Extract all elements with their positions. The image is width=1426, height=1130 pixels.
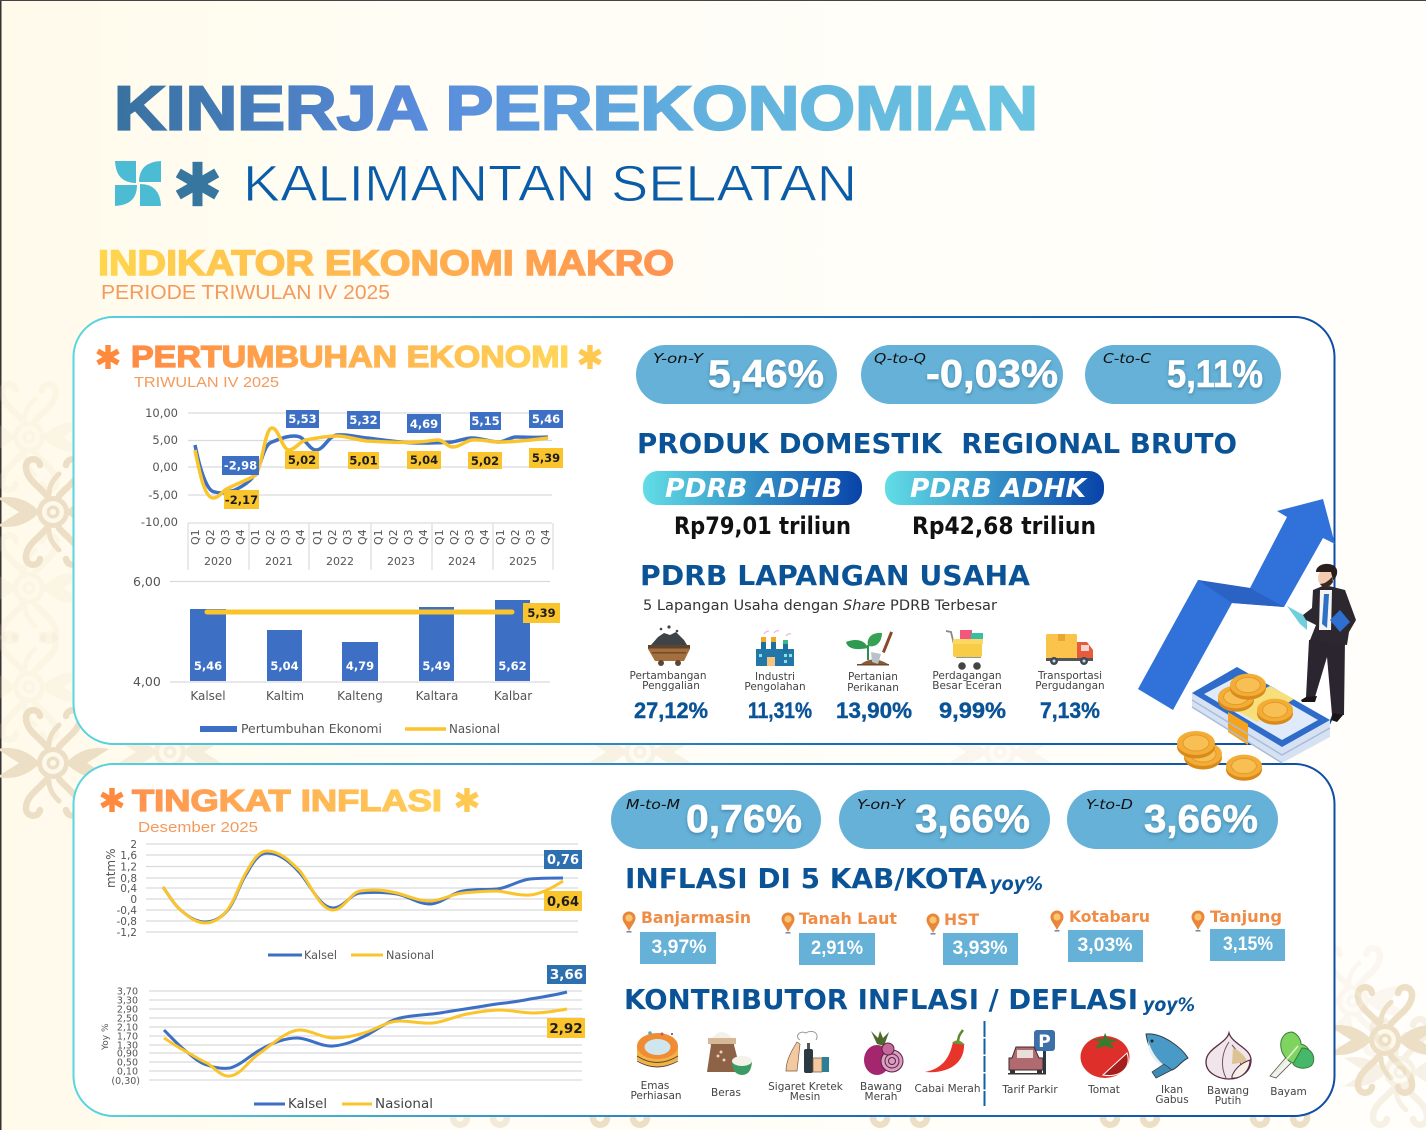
contributor labels: Cabai Merah	[914, 1083, 981, 1095]
inflasi kab/kota values: 2,91%	[811, 938, 863, 959]
line chart: inflasi yoy: 0,10	[117, 1066, 138, 1078]
line chart: pertumbuhan ekonomi per triwulan: Q3	[402, 529, 415, 545]
contributor labels: Perhiasan	[630, 1090, 682, 1102]
icon: gold jewelry	[637, 1031, 678, 1067]
panel: pertumbuhan ekonomi	[74, 317, 1334, 744]
bar chart: pertumbuhan ekonomi kalimantan: 5,49	[422, 659, 451, 673]
line chart: inflasi mtm: 0,8	[120, 873, 137, 885]
line chart: inflasi mtm: 0,4	[120, 883, 137, 895]
bar chart: pertumbuhan ekonomi kalimantan: Kalbar	[494, 689, 532, 703]
line chart: inflasi mtm	[104, 839, 582, 962]
inflasi kab/kota values: Tanah Laut	[799, 909, 897, 928]
line chart: pertumbuhan ekonomi per triwulan: Q2	[509, 529, 522, 545]
sector labels and shares: 7,13%	[1040, 698, 1100, 723]
icon: factory	[756, 631, 794, 666]
line chart: pertumbuhan ekonomi per triwulan: Q2	[326, 529, 339, 545]
inflasi kab/kota values: 3,03%	[1078, 935, 1133, 956]
inflasi kab/kota values: 3,93%	[952, 938, 1008, 959]
stat pills: inflasi: Y-to-D	[1086, 798, 1133, 813]
line chart: inflasi yoy: 3,70	[117, 986, 138, 998]
line chart: pertumbuhan ekonomi per triwulan: Q4	[234, 529, 247, 545]
inflasi kab/kota values: Banjarmasin	[641, 908, 751, 927]
icon: cigarette	[786, 1031, 829, 1073]
bar chart: pertumbuhan ekonomi kalimantan: 5,04	[270, 659, 299, 673]
line chart: inflasi yoy: 3,66	[550, 967, 583, 983]
line chart: pertumbuhan ekonomi per triwulan: Q2	[448, 529, 461, 545]
contributor labels: Gabus	[1155, 1094, 1189, 1106]
icon: mining cart	[648, 625, 690, 666]
inflasi kab/kota values	[622, 907, 1285, 965]
line chart: pertumbuhan ekonomi per triwulan: -10,00	[141, 515, 178, 529]
line chart: inflasi mtm: 0,64	[547, 895, 579, 910]
heading: tingkat inflasi	[100, 783, 479, 818]
icon: parking fee: P	[1038, 1032, 1051, 1052]
stat pills: pertumbuhan: -0,03%	[926, 353, 1058, 396]
sector labels and shares: Perikanan	[847, 682, 899, 694]
line chart: pertumbuhan ekonomi per triwulan: Q4	[356, 529, 369, 545]
sector labels and shares: 13,90%	[836, 698, 912, 723]
contributor labels: Bawang	[1207, 1085, 1249, 1097]
line chart: pertumbuhan ekonomi per triwulan: 2025	[509, 555, 537, 568]
heading: kontributor inflasi: yoy%	[1143, 994, 1195, 1016]
stat pills: inflasi: 3,66%	[1144, 798, 1258, 841]
line chart: pertumbuhan ekonomi per triwulan: 2021	[265, 555, 293, 568]
line chart: pertumbuhan ekonomi per triwulan: 4,69	[410, 417, 438, 431]
PDRB ADHK: Rp42,68 triliun	[912, 512, 1096, 540]
line chart: inflasi yoy	[101, 965, 586, 1112]
contributor labels: Merah	[865, 1091, 897, 1103]
line chart: pertumbuhan ekonomi per triwulan: 5,02	[471, 454, 499, 468]
stat pills: pertumbuhan: C-to-C	[1103, 352, 1152, 367]
icon: parking fee	[1008, 1030, 1055, 1074]
line chart: inflasi mtm: 2	[130, 839, 137, 851]
bar chart: pertumbuhan ekonomi kalimantan: 5,62	[498, 659, 527, 673]
PDRB ADHB: PDRB ADHB	[665, 474, 842, 504]
panel: tingkat inflasi	[74, 764, 1334, 1116]
inflasi kab/kota values: Tanjung	[1210, 907, 1282, 926]
line chart: pertumbuhan ekonomi per triwulan: 2020	[204, 555, 232, 568]
bar chart: pertumbuhan ekonomi kalimantan: Pertumbuhan Ekonomi	[241, 722, 382, 736]
PDRB ADHB: Rp79,01 triliun	[674, 512, 851, 540]
line chart: pertumbuhan ekonomi per triwulan: Q2	[204, 529, 217, 545]
bar chart: pertumbuhan ekonomi kalimantan: 5,46	[194, 659, 222, 673]
line chart: pertumbuhan ekonomi per triwulan: Q1	[311, 529, 324, 545]
bar chart: pertumbuhan ekonomi kalimantan: Nasional	[449, 722, 500, 736]
line chart: inflasi yoy: 0,50	[117, 1058, 138, 1068]
line chart: inflasi mtm: -1,2	[116, 927, 137, 939]
stat pills: pertumbuhan: Y-on-Y	[653, 352, 704, 367]
line chart: pertumbuhan ekonomi per triwulan: Q4	[417, 529, 430, 545]
line chart: pertumbuhan ekonomi per triwulan: Q3	[219, 529, 232, 545]
bar chart: pertumbuhan ekonomi kalimantan	[133, 574, 560, 736]
icon: shopping cart	[946, 630, 983, 670]
icon: red onion	[864, 1031, 903, 1075]
stat pills: pertumbuhan: 5,46%	[708, 353, 824, 396]
subtitle: KALIMANTAN SELATAN	[243, 155, 857, 212]
inflasi kab/kota values: HST	[944, 910, 979, 929]
line chart: inflasi mtm: 0,76	[547, 853, 579, 868]
PDRB ADHK: PDRB ADHK	[910, 474, 1088, 504]
heading: inflasi kab/kota: INFLASI DI 5 KAB/KOTA	[625, 862, 987, 895]
bar chart: pertumbuhan ekonomi kalimantan: Kaltim	[266, 689, 304, 703]
contributor labels: Tarif Parkir	[1001, 1084, 1058, 1096]
icon: red chili	[925, 1030, 965, 1072]
icon: delivery truck	[1046, 634, 1093, 665]
line chart: inflasi mtm: mtm%	[104, 848, 118, 888]
contributor labels: Putih	[1215, 1095, 1241, 1107]
icon: rice sack	[707, 1032, 752, 1075]
line chart: pertumbuhan ekonomi per triwulan: 5,02	[288, 453, 316, 467]
line chart: pertumbuhan ekonomi per triwulan: 5,39	[532, 451, 560, 465]
line chart: pertumbuhan ekonomi per triwulan: Q4	[478, 529, 491, 545]
stat pills: pertumbuhan: 5,11%	[1167, 353, 1263, 396]
line chart: pertumbuhan ekonomi per triwulan: 2022	[326, 555, 354, 568]
period: desember: Desember 2025	[138, 819, 258, 836]
line chart: pertumbuhan ekonomi per triwulan: 10,00	[145, 406, 178, 420]
divider: inflasi / deflasi	[984, 1021, 986, 1106]
line chart: inflasi mtm: Kalsel	[304, 948, 337, 962]
line chart: pertumbuhan ekonomi per triwulan: Q2	[264, 529, 277, 545]
illustration: money stack and coins	[1177, 667, 1330, 781]
line chart: pertumbuhan ekonomi per triwulan: Q4	[539, 529, 552, 545]
stat pills: inflasi	[611, 790, 1278, 849]
sector labels and shares: Perdagangan	[932, 670, 1002, 682]
PDRB ADHB	[643, 471, 862, 540]
sector labels and shares: Penggalian	[642, 680, 700, 692]
contributor labels: Emas	[641, 1080, 669, 1092]
sector labels and shares: 27,12%	[634, 698, 708, 723]
stat pills: pertumbuhan: Q-to-Q	[874, 352, 926, 367]
line chart: pertumbuhan ekonomi per triwulan: Q1	[433, 529, 446, 545]
line chart: inflasi mtm: -0,4	[116, 905, 137, 917]
line chart: pertumbuhan ekonomi per triwulan: -2,17	[225, 493, 258, 507]
sector labels and shares: Pertanian	[848, 671, 898, 683]
contributor labels: Ikan	[1161, 1084, 1183, 1096]
inflasi kab/kota values: 3,15%	[1223, 934, 1273, 955]
contributor labels: Tomat	[1087, 1084, 1120, 1096]
line chart: inflasi yoy: 0,90	[117, 1048, 138, 1060]
line chart: pertumbuhan ekonomi per triwulan: -2,98	[224, 458, 257, 472]
stat pills: inflasi: M-to-M	[626, 798, 680, 813]
stat pills: inflasi: 3,66%	[915, 798, 1030, 841]
line chart: inflasi mtm: 1,6	[120, 850, 137, 862]
line chart: pertumbuhan ekonomi per triwulan: Q1	[249, 529, 262, 545]
stat pills: inflasi: Y-on-Y	[857, 798, 906, 813]
bar chart: pertumbuhan ekonomi kalimantan: Kalsel	[190, 689, 226, 703]
line chart: pertumbuhan ekonomi per triwulan: Q1	[189, 529, 202, 545]
bar chart: pertumbuhan ekonomi kalimantan: 5,39	[527, 606, 556, 620]
sector labels and shares: Transportasi	[1037, 670, 1102, 682]
heading: pertumbuhan ekonomi: PERTUMBUHAN EKONOMI	[131, 339, 569, 374]
period: triwulan: TRIWULAN IV 2025	[134, 374, 279, 391]
line chart: pertumbuhan ekonomi per triwulan: 0,00	[152, 460, 178, 474]
sector labels and shares: Besar Eceran	[932, 680, 1002, 692]
line chart: pertumbuhan ekonomi per triwulan: 2024	[448, 555, 476, 568]
line chart: inflasi mtm: -0,8	[116, 916, 137, 928]
line chart: pertumbuhan ekonomi per triwulan: Q1	[494, 529, 507, 545]
bar chart: pertumbuhan ekonomi kalimantan: Kaltara	[416, 689, 458, 703]
sector labels and shares: Pengolahan	[744, 681, 806, 693]
line chart: inflasi yoy: 3,30	[117, 996, 138, 1006]
sector labels and shares: Pergudangan	[1035, 680, 1105, 692]
line chart: pertumbuhan ekonomi per triwulan: 5,00	[152, 433, 178, 447]
line chart: pertumbuhan ekonomi per triwulan: 5,32	[349, 413, 378, 427]
stat pills: inflasi: 0,76%	[686, 798, 802, 841]
heading: tingkat inflasi: TINGKAT INFLASI	[132, 783, 442, 818]
contributor labels: Bawang	[860, 1081, 902, 1093]
line chart: inflasi yoy: Yoy %	[101, 1023, 111, 1051]
line chart: inflasi mtm: 1,2	[120, 862, 137, 874]
heading: PDRB lapangan usaha: PDRB LAPANGAN USAHA	[640, 559, 1030, 592]
line chart: inflasi yoy: 2,10	[117, 1022, 138, 1034]
section heading: indikator ekonomi makro: INDIKATOR EKONOMI MAKRO	[98, 244, 674, 283]
sector labels and shares: Pertambangan	[629, 670, 707, 682]
line chart: pertumbuhan ekonomi per triwulan: Q2	[387, 529, 400, 545]
line chart: inflasi mtm: Nasional	[386, 948, 434, 962]
illustration: businessman	[1287, 564, 1356, 722]
line chart: inflasi yoy: Kalsel	[288, 1096, 327, 1112]
bar chart: pertumbuhan ekonomi kalimantan: 4,00	[133, 674, 161, 689]
sector labels and shares: Industri	[755, 671, 795, 683]
contributor labels: Bayam	[1270, 1086, 1307, 1098]
sector labels and shares: 9,99%	[939, 698, 1006, 723]
icon: asterisk logo	[176, 162, 219, 206]
line chart: inflasi mtm: 0	[130, 894, 137, 906]
inflasi kab/kota values: 3,97%	[652, 937, 707, 958]
line chart: pertumbuhan ekonomi per triwulan: Q3	[341, 529, 354, 545]
line chart: pertumbuhan ekonomi per triwulan: 5,01	[349, 454, 378, 468]
inflasi kab/kota values: Kotabaru	[1069, 907, 1150, 926]
line chart: pertumbuhan ekonomi per triwulan: Q3	[279, 529, 292, 545]
heading: kontributor inflasi: KONTRIBUTOR INFLASI / DEFLASI	[624, 983, 1138, 1016]
PDRB ADHK	[885, 471, 1104, 540]
contributor labels: Mesin	[790, 1091, 820, 1103]
bar chart: pertumbuhan ekonomi kalimantan: Kalteng	[337, 689, 383, 703]
line chart: pertumbuhan ekonomi per triwulan: 5,46	[532, 412, 560, 426]
contributor labels: Sigaret Kretek	[768, 1081, 844, 1093]
bar chart: pertumbuhan ekonomi kalimantan: 6,00	[133, 574, 161, 589]
line chart: inflasi yoy: 1,30	[117, 1040, 138, 1052]
icon: gabus fish	[1146, 1034, 1188, 1078]
sector labels and shares	[629, 670, 1105, 723]
line chart: inflasi yoy: 2,92	[549, 1021, 583, 1037]
icon: spinach	[1270, 1032, 1314, 1078]
heading: inflasi kab/kota: yoy%	[990, 873, 1043, 895]
line chart: pertumbuhan ekonomi per triwulan: -5,00	[148, 488, 178, 502]
contributor labels	[630, 1080, 1307, 1107]
line chart: pertumbuhan ekonomi per triwulan: 5,15	[471, 414, 500, 428]
title: KINERJA PEREKONOMIAN	[114, 74, 1038, 144]
contributor labels: Beras	[711, 1087, 741, 1099]
icon: garlic	[1206, 1033, 1251, 1079]
heading: PDRB: PRODUK DOMESTIK REGIONAL BRUTO	[637, 427, 1237, 460]
icon: pinwheel logo	[115, 161, 161, 206]
section period: PERIODE TRIWULAN IV 2025	[101, 282, 390, 304]
line chart: inflasi yoy: Nasional	[375, 1096, 433, 1112]
stat pills: pertumbuhan	[636, 345, 1281, 404]
line chart: inflasi yoy: 2,50	[117, 1014, 138, 1024]
illustration: rising arrow	[1138, 499, 1335, 710]
line chart: pertumbuhan ekonomi per triwulan	[141, 406, 563, 570]
line chart: inflasi yoy: 1,70	[117, 1032, 138, 1042]
icon: tomato	[1080, 1033, 1130, 1078]
line chart: pertumbuhan ekonomi per triwulan: 5,04	[410, 453, 438, 467]
note: lapangan usaha: 5 Lapangan Usaha dengan Share PDRB Terbesar	[643, 598, 997, 614]
line chart: pertumbuhan ekonomi per triwulan: 5,53	[288, 412, 317, 426]
bar chart: pertumbuhan ekonomi kalimantan: 4,79	[346, 659, 374, 673]
line chart: pertumbuhan ekonomi per triwulan: Q3	[524, 529, 537, 545]
sector labels and shares: 11,31%	[748, 698, 812, 723]
line chart: pertumbuhan ekonomi per triwulan: Q3	[463, 529, 476, 545]
line chart: inflasi yoy: (0,30)	[111, 1076, 140, 1087]
line chart: pertumbuhan ekonomi per triwulan: Q1	[372, 529, 385, 545]
icon: plant and shovel	[846, 631, 893, 666]
line chart: pertumbuhan ekonomi per triwulan: 2023	[387, 555, 415, 568]
line chart: inflasi yoy: 2,90	[117, 1004, 138, 1016]
line chart: pertumbuhan ekonomi per triwulan: Q4	[294, 529, 307, 545]
